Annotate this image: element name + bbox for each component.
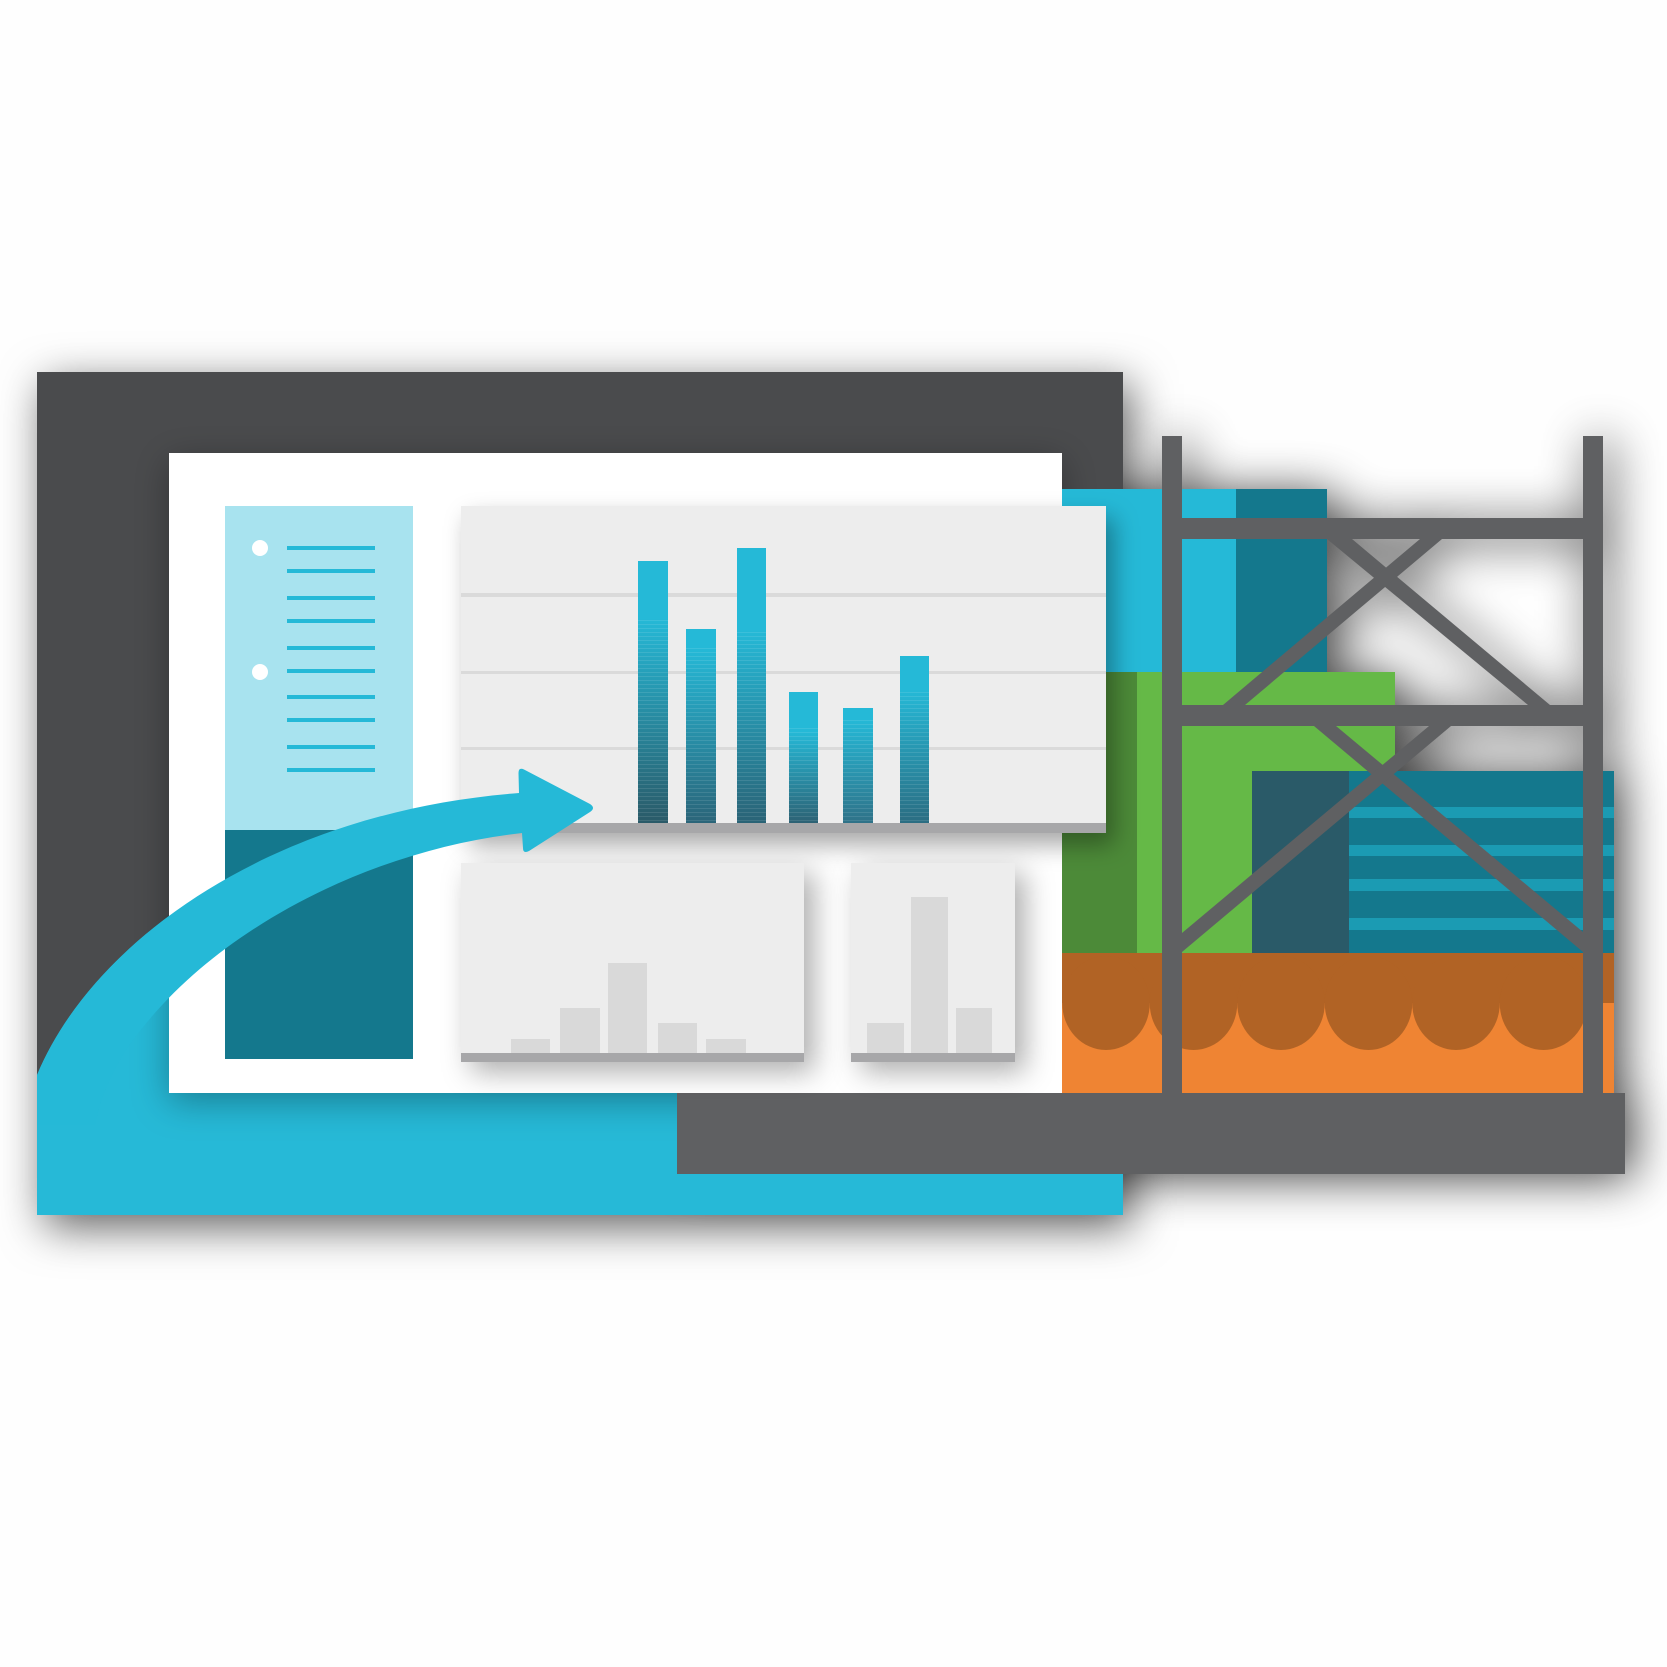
panel: dark presentation screen — [37, 372, 1123, 1215]
chart background — [461, 506, 1106, 833]
shadow of the scaffold group — [685, 440, 1633, 1178]
baseline — [851, 1053, 1015, 1062]
dark slate block — [1252, 771, 1349, 953]
dark green block — [1062, 672, 1137, 953]
orange ground — [1062, 953, 1614, 1093]
arrow: curved growth arrow — [37, 769, 593, 1125]
panel: main bar chart — [461, 506, 1106, 833]
panel: sidebar — [225, 506, 413, 1059]
bars — [867, 897, 992, 1053]
panel: small chart right — [851, 863, 1015, 1062]
panel: white document page — [169, 453, 1062, 1093]
scaffold frame — [1162, 436, 1603, 1093]
sidebar dark area — [225, 830, 413, 1059]
platform base — [677, 1093, 1625, 1174]
bars — [511, 963, 746, 1053]
teal block — [1236, 489, 1327, 672]
text lines — [287, 546, 375, 772]
construction blocks and scaffold — [1062, 436, 1614, 1093]
dark panel top cover — [37, 372, 1123, 489]
chart background — [461, 863, 804, 1062]
bullet dots — [252, 540, 268, 680]
blue lower band of the screen — [37, 793, 1123, 1215]
cyan block — [1062, 489, 1236, 672]
bar texture — [638, 620, 929, 823]
baseline — [461, 1053, 804, 1062]
chart baseline — [461, 823, 1106, 833]
dark panel side cover — [37, 489, 500, 1075]
striped teal block — [1349, 771, 1614, 953]
bars — [638, 548, 929, 823]
chart background — [851, 863, 1015, 1062]
panel: small chart left — [461, 863, 804, 1062]
sidebar light area — [225, 506, 413, 830]
green block — [1137, 672, 1395, 953]
grid lines — [461, 593, 1106, 750]
brown scalloped soil — [1062, 953, 1614, 1050]
